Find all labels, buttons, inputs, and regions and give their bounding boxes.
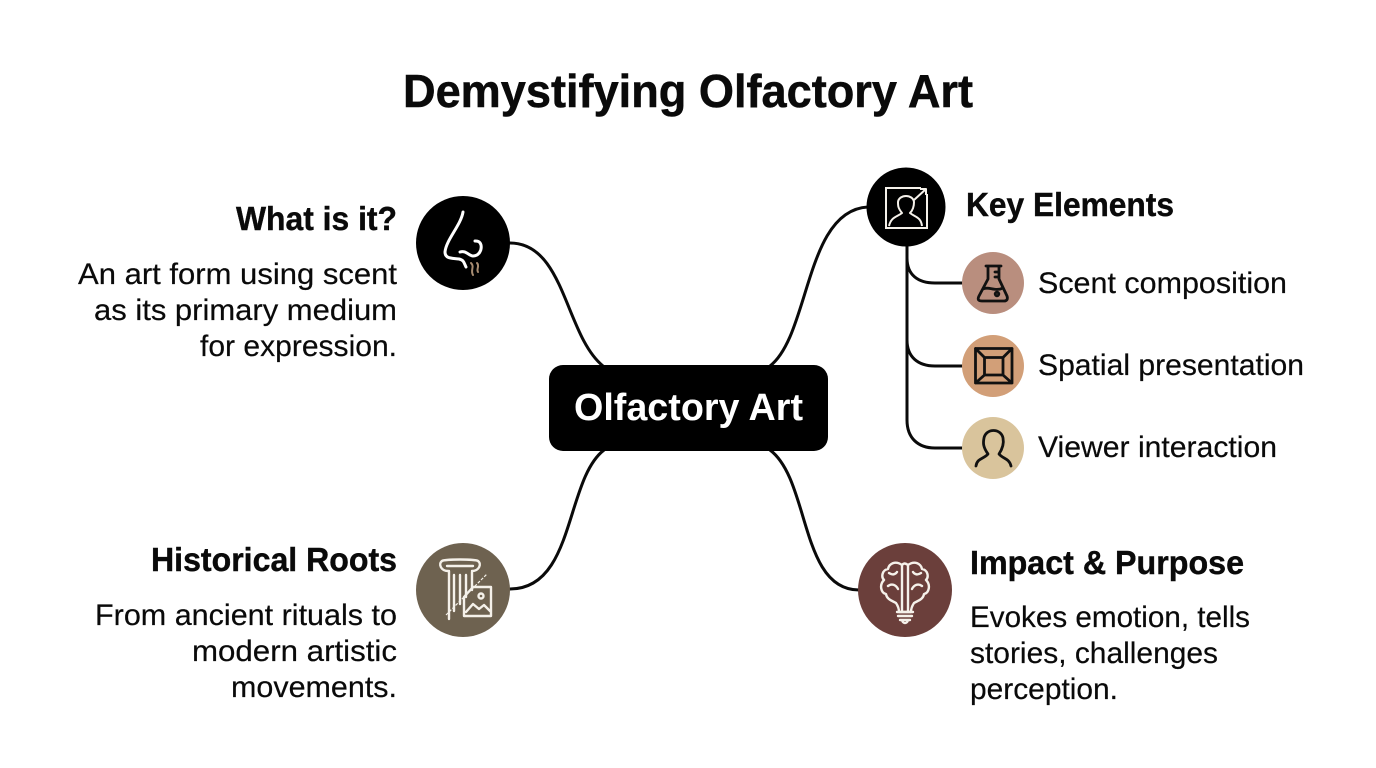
heading: Impact and Purpose: Impact & Purpose: [970, 544, 1244, 581]
icon: flask: [962, 252, 1024, 314]
icon: brain lightbulb: [858, 543, 952, 637]
icon: room box: [962, 335, 1024, 397]
central node: [549, 365, 828, 451]
panel: What is it: [78, 200, 398, 363]
icon: column and picture: [416, 543, 510, 637]
connector: center to Historical Roots: [510, 450, 604, 589]
heading: What is it: What is it?: [236, 200, 397, 237]
text: Historical Roots description: modern artistic: [192, 635, 397, 668]
panel: Historical Roots: [95, 541, 397, 704]
icon: nose: [416, 196, 510, 290]
text: Historical Roots description: movements.: [231, 671, 397, 704]
text: What is it description: An art form using scent: [78, 258, 398, 291]
icon: person: [962, 417, 1024, 479]
connector: center to Impact and Purpose: [770, 450, 859, 590]
text: What is it description: as its primary medium: [94, 294, 397, 327]
text: What is it description: for expression.: [200, 330, 397, 363]
text: Historical Roots description: From ancient rituals to: [95, 599, 397, 632]
text: Impact and Purpose description: stories, challenges: [970, 637, 1218, 670]
panel: Key Elements heading: Key Elements: [966, 186, 1174, 223]
central node: Olfactory Art: [574, 387, 803, 429]
text: What is it description: [78, 258, 398, 363]
text: Impact and Purpose description: [970, 601, 1250, 706]
connector: center to What is it: [510, 243, 603, 366]
text: Impact and Purpose description: Evokes emotion, tells: [970, 601, 1250, 634]
panel: Impact and Purpose: [970, 544, 1250, 706]
connectors: Key Elements branches: [907, 245, 962, 448]
connector: center to Key Elements: [770, 207, 868, 366]
text: Historical Roots description: [95, 599, 397, 704]
text: Impact and Purpose description: perception.: [970, 673, 1118, 706]
text: Scent composition: Scent composition: [1038, 267, 1287, 300]
text: Viewer interaction: Viewer interaction: [1038, 431, 1277, 464]
text: Spatial presentation: Spatial presentation: [1038, 349, 1304, 382]
icon: framed person: [866, 168, 946, 246]
title: Demystifying Olfactory Art: [403, 65, 973, 117]
heading: Historical Roots: Historical Roots: [151, 541, 397, 578]
